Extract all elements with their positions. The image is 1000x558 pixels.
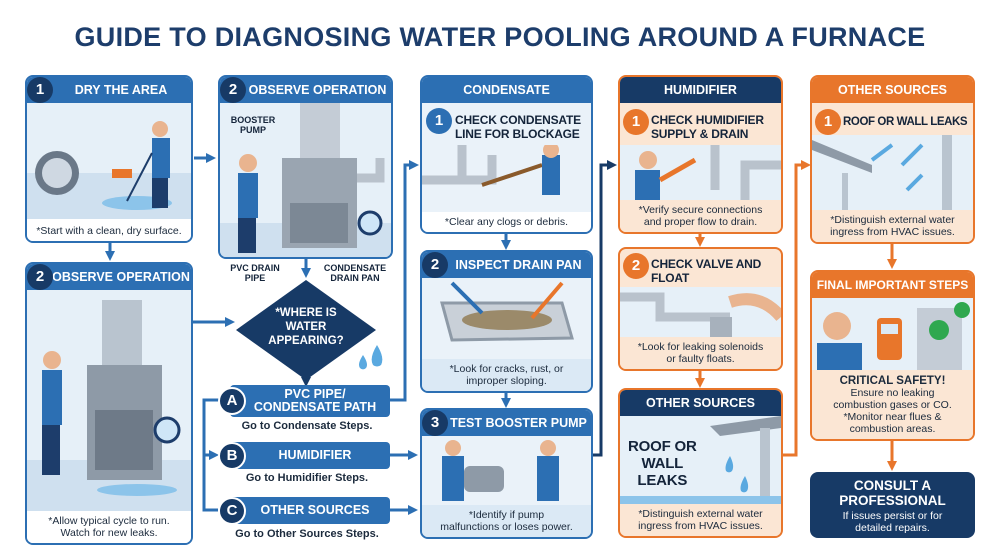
step 1 check condensate line: 1	[435, 112, 443, 129]
consult a professional: If issues persist or for	[843, 510, 942, 522]
other sources (humidifier column): *Distinguish external water	[638, 508, 763, 520]
option C: C	[227, 502, 237, 519]
illustration: furnace	[27, 290, 191, 511]
final important steps: CRITICAL SAFETY!	[840, 375, 945, 387]
column: humidifier	[618, 75, 783, 538]
diamond: where is water appearing: APPEARING?	[268, 335, 344, 347]
step 1 humidifier supply: HUMIDIFIER	[664, 83, 737, 97]
label: pvc drain pipe	[230, 263, 280, 283]
final important steps	[810, 270, 975, 441]
step 2 valve and float: 2	[632, 257, 640, 274]
step 1 check condensate line: LINE FOR BLOCKAGE	[455, 127, 580, 141]
final important steps: combustion areas.	[850, 423, 935, 435]
panel: observe operation left: 2	[36, 268, 44, 285]
step 2 valve and float: *Look for leaking solenoids	[638, 341, 763, 353]
icon: water drops	[359, 345, 382, 370]
diamond: where is water appearing	[236, 280, 376, 377]
other sources (humidifier column): ingress from HVAC issues.	[638, 520, 763, 532]
panel: observe operation center: 2	[229, 81, 237, 98]
step roof or wall leaks: *Distinguish external water	[830, 214, 955, 226]
step 1 check condensate line: CONDENSATE	[463, 83, 550, 97]
label: booster pump: BOOSTER	[231, 115, 275, 125]
illustration: furnace with pump	[220, 103, 391, 257]
option B	[218, 442, 390, 484]
panel: dry the area: 1	[36, 81, 44, 98]
step 3 test booster pump: malfunctions or loses power.	[440, 521, 573, 533]
label: booster pump	[231, 115, 275, 135]
label: booster pump: PUMP	[240, 125, 266, 135]
consult a professional: detailed repairs.	[855, 522, 930, 534]
title: GUIDE TO DIAGNOSING WATER POOLING AROUND A FURNACE	[74, 22, 926, 52]
panel: observe operation center: OBSERVE OPERATION	[249, 83, 386, 97]
panel: observe operation center	[218, 75, 393, 259]
label: pvc drain pipe: PVC DRAIN	[230, 263, 280, 273]
step 2 inspect drain pan: *Look for cracks, rust, or	[450, 363, 563, 375]
step 3 test booster pump: TEST BOOSTER PUMP	[450, 416, 587, 430]
step 3 test booster pump: *Identify if pump	[469, 509, 544, 521]
step 1 humidifier supply: SUPPLY & DRAIN	[651, 127, 748, 141]
step 2 inspect drain pan: 2	[431, 256, 439, 273]
step 1 humidifier supply	[618, 75, 783, 234]
option A: CONDENSATE PATH	[254, 400, 376, 414]
panel: observe operation left: OBSERVE OPERATION	[52, 270, 190, 284]
option A: A	[227, 392, 237, 409]
step 2 inspect drain pan	[420, 250, 593, 393]
option A	[218, 385, 390, 432]
step 2 valve and float: CHECK VALVE AND	[651, 257, 761, 271]
step 1 check condensate line: *Clear any clogs or debris.	[445, 216, 568, 228]
step roof or wall leaks: 1	[824, 113, 832, 130]
other sources (humidifier column): ROOF OR	[628, 438, 697, 455]
consult a professional	[810, 472, 975, 538]
illustration: mopping	[27, 103, 191, 219]
option C: OTHER SOURCES	[260, 503, 370, 517]
final important steps: *Monitor near flues &	[843, 411, 942, 423]
consult a professional: PROFESSIONAL	[839, 493, 946, 508]
step roof or wall leaks: OTHER SOURCES	[838, 83, 947, 97]
caption: Watch for new leaks.	[60, 527, 158, 539]
other sources (humidifier column)	[618, 388, 783, 538]
step 1 check condensate line	[420, 75, 593, 234]
step 1 humidifier supply: 1	[632, 113, 640, 130]
final important steps: Ensure no leaking	[850, 387, 935, 399]
caption: *Allow typical cycle to run.	[48, 515, 170, 527]
other sources (humidifier column): OTHER SOURCES	[646, 396, 755, 410]
label: condensate drain pan	[324, 263, 386, 283]
option B: Go to Humidifier Steps.	[246, 472, 368, 484]
other sources (humidifier column): WALL	[641, 455, 683, 472]
panel: dry the area: DRY THE AREA	[75, 83, 167, 97]
step roof or wall leaks: ingress from HVAC issues.	[830, 226, 955, 238]
option C	[220, 497, 390, 540]
step 2 valve and float	[618, 247, 783, 371]
option A: PVC PIPE/	[284, 387, 346, 401]
caption	[27, 511, 191, 543]
option B: B	[227, 447, 237, 464]
panel: dry the area	[25, 75, 193, 243]
diamond: where is water appearing: *WHERE IS	[275, 307, 337, 319]
step 2 valve and float: FLOAT	[651, 271, 689, 285]
step 1 humidifier supply: and proper flow to drain.	[644, 216, 757, 228]
step 1 humidifier supply: *Verify secure connections	[639, 204, 762, 216]
option A: Go to Condensate Steps.	[242, 420, 372, 432]
step 2 valve and float: or faulty floats.	[666, 353, 735, 365]
step roof or wall leaks: ROOF OR WALL LEAKS	[843, 116, 967, 128]
step roof or wall leaks	[810, 75, 975, 244]
step 2 inspect drain pan: improper sloping.	[466, 375, 547, 387]
step 1 check condensate line: CHECK CONDENSATE	[455, 113, 581, 127]
caption	[27, 221, 191, 241]
diamond: where is water appearing: WATER	[286, 321, 327, 333]
consult a professional: CONSULT A	[854, 478, 931, 493]
column: condensate	[420, 75, 593, 539]
step 3 test booster pump	[420, 408, 593, 539]
step 2 inspect drain pan: INSPECT DRAIN PAN	[455, 258, 582, 272]
label: condensate drain pan: CONDENSATE	[324, 263, 386, 273]
option B: HUMIDIFIER	[279, 448, 351, 462]
column: other sources right	[810, 75, 975, 538]
caption: *Start with a clean, dry surface.	[36, 225, 182, 237]
final important steps: combustion gases or CO.	[833, 399, 952, 411]
other sources (humidifier column): LEAKS	[637, 472, 687, 489]
final important steps: FINAL IMPORTANT STEPS	[817, 278, 968, 292]
step 1 humidifier supply: CHECK HUMIDIFIER	[651, 113, 764, 127]
step 3 test booster pump: 3	[431, 414, 439, 431]
label: condensate drain pan: DRAIN PAN	[330, 273, 380, 283]
option C: Go to Other Sources Steps.	[235, 528, 379, 540]
panel: observe operation left	[25, 262, 193, 545]
label: pvc drain pipe: PIPE	[245, 273, 265, 283]
